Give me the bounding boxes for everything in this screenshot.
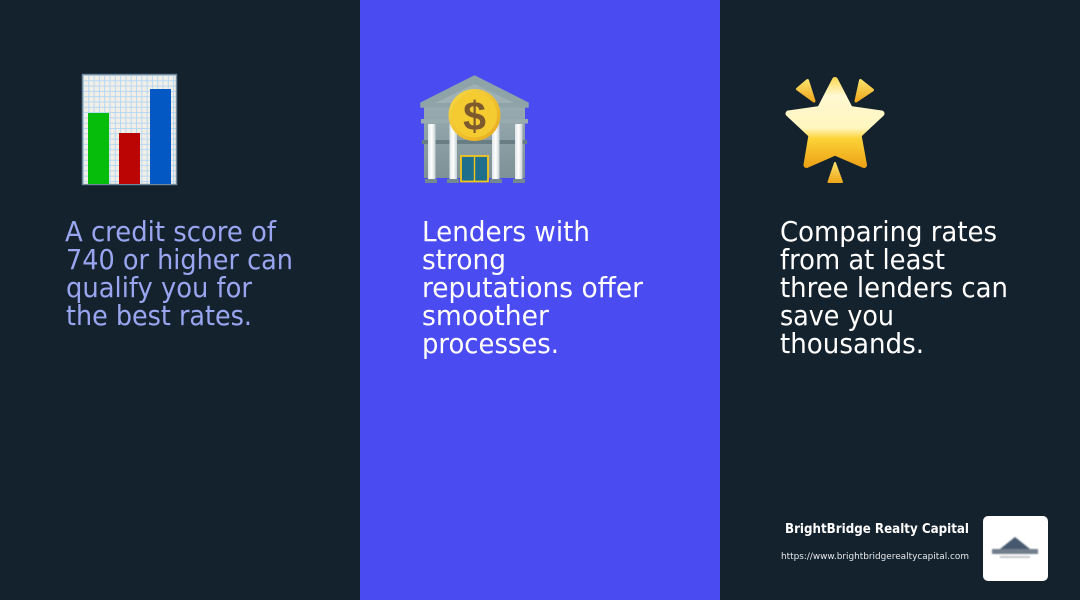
brand footer xyxy=(781,516,1048,581)
website url: https://www.brightbridgerealtycapital.com xyxy=(781,552,969,562)
text: credit score statement: 740 or higher can xyxy=(66,243,293,276)
text: lender reputation statement: smoother xyxy=(422,299,549,332)
text: credit score statement: the best rates. xyxy=(66,299,252,332)
logo tile xyxy=(983,516,1048,581)
text: lender reputation statement xyxy=(422,215,643,360)
panel: credit score xyxy=(0,0,360,600)
icon glyph: dollar sign: $ xyxy=(463,93,486,139)
text: lender reputation statement: Lenders with xyxy=(422,215,590,248)
text: compare rates statement: save you xyxy=(780,299,894,332)
icon: bank with dollar coin xyxy=(421,76,528,183)
panel: lender reputation xyxy=(360,0,720,600)
text: compare rates statement: from at least xyxy=(780,243,945,276)
text: compare rates statement: Comparing rates xyxy=(780,215,997,248)
text: credit score statement xyxy=(65,215,293,332)
brand name: BrightBridge Realty Capital xyxy=(785,522,969,537)
text: credit score statement: qualify you for xyxy=(66,271,252,304)
text: lender reputation statement: processes. xyxy=(422,327,559,360)
panel: compare rates xyxy=(720,0,1080,600)
text: credit score statement: A credit score of xyxy=(65,215,277,248)
icon: bar chart xyxy=(82,74,176,184)
text: lender reputation statement: strong xyxy=(422,243,506,276)
icon: glowing star xyxy=(788,80,882,182)
text: compare rates statement xyxy=(780,215,1008,360)
text: lender reputation statement: reputations offer xyxy=(422,271,643,304)
text: compare rates statement: three lenders can xyxy=(780,271,1008,304)
text: compare rates statement: thousands. xyxy=(780,327,924,360)
